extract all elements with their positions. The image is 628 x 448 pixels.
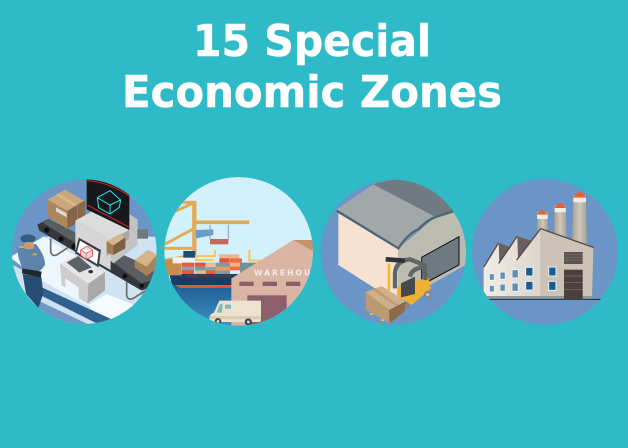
smokestacks bbox=[537, 192, 587, 247]
delivery van bbox=[209, 301, 261, 326]
factory windows bbox=[489, 267, 556, 292]
desk and keyboard bbox=[60, 255, 105, 304]
circle: port and warehouse bbox=[164, 177, 313, 326]
title bbox=[122, 16, 502, 118]
forklift bbox=[386, 259, 431, 310]
sea bbox=[172, 283, 232, 326]
officer bbox=[17, 234, 45, 308]
warehouse: WAREHOUSE bbox=[254, 268, 327, 277]
factory building bbox=[484, 229, 601, 299]
building walls bbox=[338, 212, 468, 303]
title: Economic Zones bbox=[122, 67, 502, 118]
floor bbox=[10, 237, 157, 327]
crane bbox=[163, 201, 249, 261]
circle: factory bbox=[472, 179, 618, 325]
small boxes bbox=[107, 229, 157, 276]
circle: warehouse forklift bbox=[321, 177, 468, 325]
title: 15 Special bbox=[193, 16, 431, 67]
circle: customs inspection bbox=[10, 179, 157, 327]
cardboard box bbox=[366, 286, 406, 323]
building roof bbox=[337, 177, 462, 248]
laptop monitor bbox=[75, 238, 101, 267]
cardboard box large bbox=[47, 190, 85, 229]
infographic canvas bbox=[12, 22, 618, 326]
warehouse bbox=[231, 240, 313, 326]
scanner machine bbox=[75, 211, 138, 270]
container ship bbox=[165, 250, 263, 288]
scanner screen bbox=[87, 179, 129, 230]
conveyor belt bbox=[37, 219, 157, 299]
